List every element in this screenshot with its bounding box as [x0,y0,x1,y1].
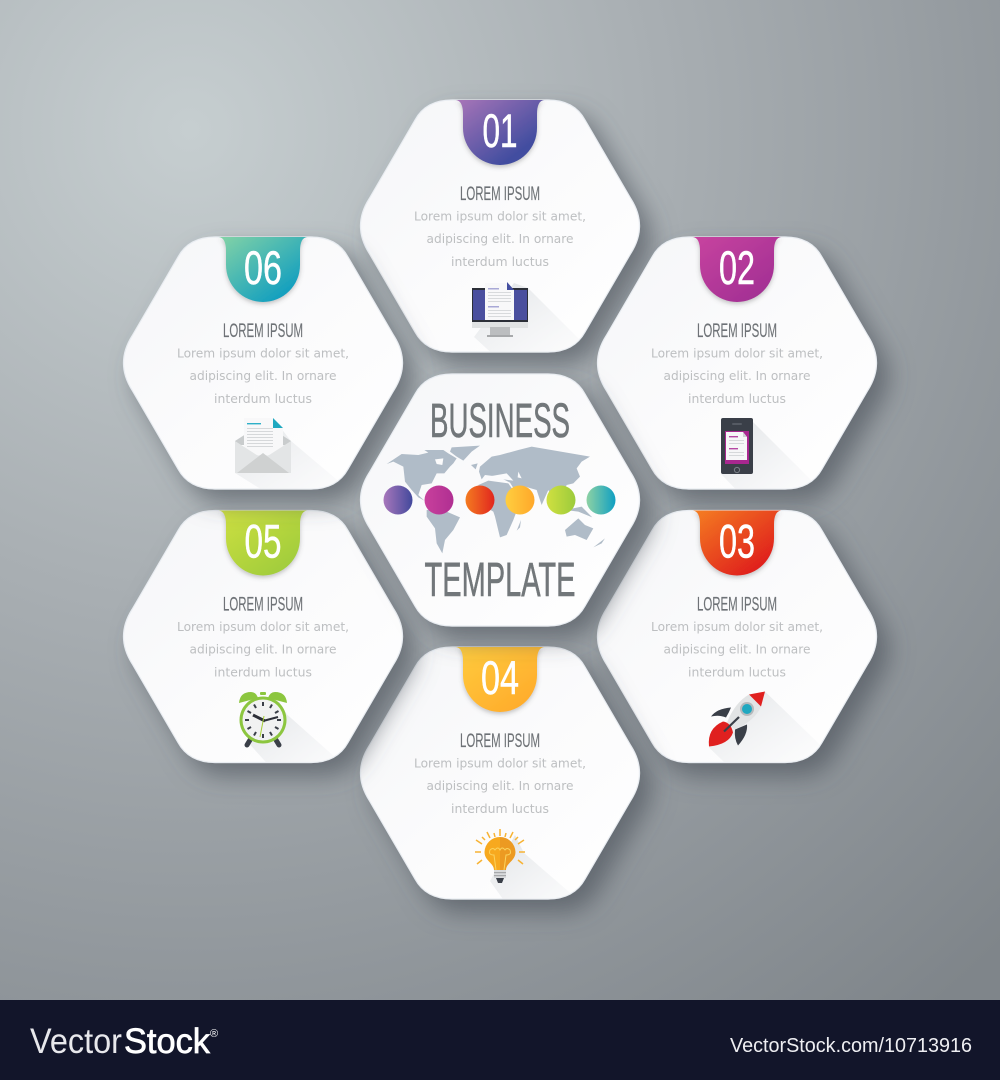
text block 01: LOREM IPSUM [460,184,540,205]
text block 06: adipiscing elit. In ornare [190,368,337,383]
text block 01: interdum luctus [451,254,549,269]
text block 05: interdum luctus [214,664,312,680]
text block 02 [651,321,823,406]
text block 03: Lorem ipsum dolor sit amet, [651,619,823,634]
heading: TEMPLATE: TEMPLATE [424,554,576,607]
text block 05: LOREM IPSUM [223,594,303,616]
center hexagon [360,374,640,626]
badge 02 [693,237,781,302]
badge 04: 04 [481,651,519,704]
hexagon 01 [360,100,640,370]
text block 04: interdum luctus [451,801,549,816]
icon: smartphone [721,418,753,474]
text block 02: adipiscing elit. In ornare [664,368,811,383]
footer logo: ® [210,1028,218,1040]
icon: light bulb [475,829,525,883]
text block 04: Lorem ipsum dolor sit amet, [414,756,586,770]
heading: BUSINESS: BUSINESS [430,395,570,448]
text block 05 [177,594,349,680]
text block 02: interdum luctus [688,391,786,406]
badge 04 [456,647,544,712]
badge 03: 03 [719,514,755,568]
hexagon 02 [598,237,876,506]
badge 05 [219,510,307,576]
hexagon 03 [598,510,876,776]
badge 05: 05 [244,514,282,568]
badge 03 [693,510,781,576]
footer id: VectorStock.com/10713916 [730,1035,972,1057]
text block 01: Lorem ipsum dolor sit amet, [414,208,586,224]
icon: alarm clock [239,692,287,745]
text block 02: Lorem ipsum dolor sit amet, [651,346,823,360]
footer bar [0,1000,1000,1080]
text block 02: LOREM IPSUM [697,321,777,342]
world map [387,446,605,553]
text block 06: Lorem ipsum dolor sit amet, [177,346,349,360]
text block 06: LOREM IPSUM [223,321,303,342]
text block 05: adipiscing elit. In ornare [190,642,337,656]
footer logo: Stock [124,1022,210,1061]
hexagon 06 [124,237,402,506]
text block 04: LOREM IPSUM [460,731,540,752]
text block 05: Lorem ipsum dolor sit amet, [177,619,349,634]
badge 02: 02 [719,241,755,294]
text block 01: adipiscing elit. In ornare [426,231,574,246]
badge 06 [219,237,307,302]
text block 03 [651,594,823,680]
icon: rocket [709,692,765,746]
hexagon 05 [124,510,402,786]
badge 06: 06 [244,241,282,294]
badge 01 [456,100,544,165]
icon: envelope with document [235,418,291,473]
hexagon 04 [360,647,640,923]
text block 04 [414,731,586,816]
footer logo: Vector [30,1022,122,1061]
text block 03: interdum luctus [688,664,786,680]
badge 01: 01 [482,104,518,157]
text block 06 [177,321,349,406]
text block 03: LOREM IPSUM [697,594,777,616]
text block 01 [414,184,586,269]
text block 04: adipiscing elit. In ornare [426,778,574,793]
colored dots [384,486,616,514]
icon: monitor with document [472,282,528,337]
footer logo [30,1022,218,1061]
text block 03: adipiscing elit. In ornare [664,642,811,656]
text block 06: interdum luctus [214,391,312,406]
